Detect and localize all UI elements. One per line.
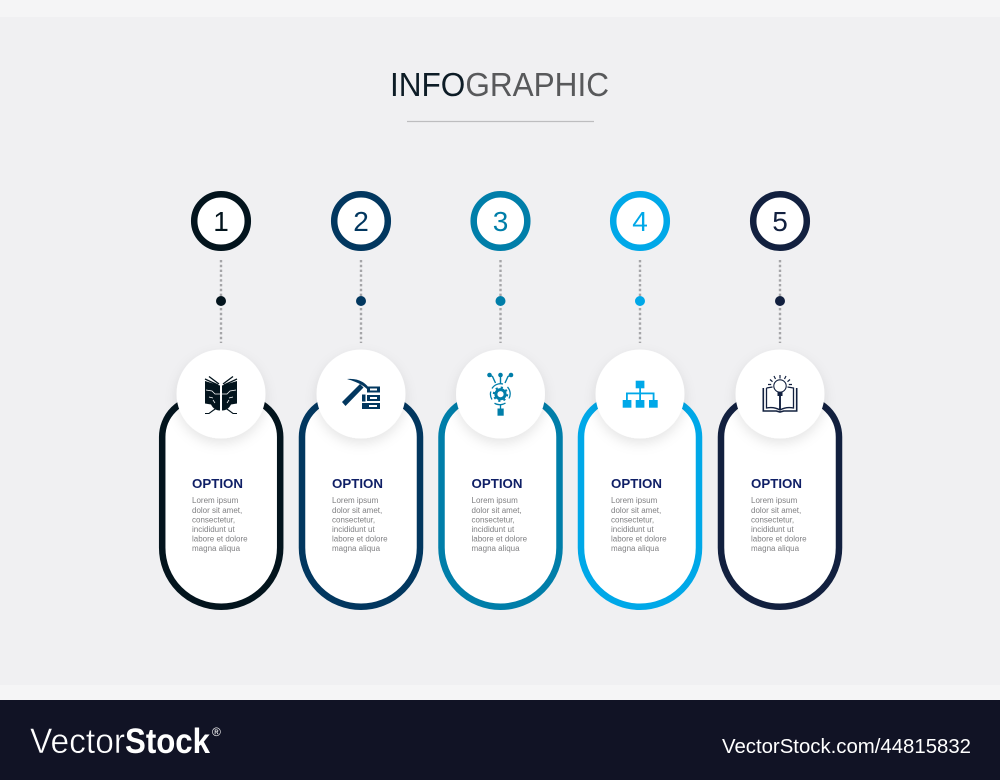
card 5 heading: OPTION [751,476,802,491]
number badge 4: 4 [632,206,648,237]
card 3 heading: OPTION [472,476,522,491]
card 3 text: dolor sit amet, [472,506,522,515]
footer logo: Vector [30,722,125,761]
icon disc 4 [596,350,684,438]
number badge 2: 2 [353,206,369,237]
column 5 [721,194,839,607]
card 3 text: incididunt ut [472,525,515,534]
card 4 text: dolor sit amet, [611,506,661,515]
icon disc 5 [736,350,824,438]
registered mark: ® [212,725,221,739]
card 1 text: labore et dolore [192,534,248,544]
card 2 heading: OPTION [332,476,383,491]
column 1 [162,194,280,607]
footer bar [0,700,1000,780]
footer logo [30,722,210,761]
icon: gear with nodes [487,373,513,416]
number badge 3: 3 [493,206,508,237]
card 4 text: incididunt ut [611,525,654,534]
card 2 [302,398,420,607]
icon: pickaxe and data [342,379,380,409]
dotted connector 2 [356,260,366,343]
dotted connector 5 [775,260,785,343]
card 5 text: Lorem ipsum [751,496,798,505]
card 4 text: labore et dolore [611,534,667,544]
dotted connector 4 [635,260,645,343]
card 5 text: magna aliqua [751,544,800,553]
card 3 text: consectetur, [472,516,515,524]
dotted connector 3 [496,260,506,343]
card 1 [162,398,280,607]
card 5 text: labore et dolore [751,534,807,544]
card 2 text: dolor sit amet, [332,506,382,515]
card 4 text: consectetur, [611,516,654,524]
footer url: VectorStock.com/44815832 [722,736,971,758]
card 3 text: magna aliqua [472,544,520,553]
card 3 [442,398,560,607]
icon: book with light bulb [763,375,797,412]
card 3 text: Lorem ipsum [472,496,518,505]
icon: brain book [205,376,237,414]
number badge 4 [613,194,667,248]
number badge 2 [334,194,388,248]
card 2 text: labore et dolore [332,534,388,544]
card 1 text: incididunt ut [192,525,235,534]
dotted connector 1 [216,260,226,343]
card 1 text: Lorem ipsum [192,496,239,505]
column 4 [581,194,699,607]
card 4 heading: OPTION [611,476,662,491]
card 5 text: consectetur, [751,516,794,524]
card 1 text: magna aliqua [192,544,241,553]
column 3 [442,194,560,607]
icon disc 1 [176,350,266,438]
column 2 [302,194,420,607]
icon: org chart [623,381,658,408]
card 2 text: Lorem ipsum [332,496,379,505]
card 4 [581,398,699,607]
icon disc 3 [456,350,545,438]
card 2 text: magna aliqua [332,544,381,553]
icon disc 2 [316,350,406,438]
number badge 5 [753,194,807,248]
number badge 1 [194,194,248,248]
number badge 1: 1 [213,206,229,237]
card 4 text: Lorem ipsum [611,496,658,505]
card 5 text: incididunt ut [751,525,794,534]
card 1 text: dolor sit amet, [192,506,242,515]
card 3 text: labore et dolore [472,534,528,544]
card 4 text: magna aliqua [611,544,660,553]
title: INFOGRAPHIC [390,66,609,103]
number badge 3 [474,194,527,248]
card 2 text: incididunt ut [332,525,375,534]
card 2 text: consectetur, [332,516,375,524]
card 1 heading: OPTION [192,476,243,491]
card 5 text: dolor sit amet, [751,506,801,515]
card 1 text: consectetur, [192,516,235,524]
footer logo: Stock [125,722,210,761]
card 5 [721,398,839,607]
number badge 5: 5 [772,206,788,237]
